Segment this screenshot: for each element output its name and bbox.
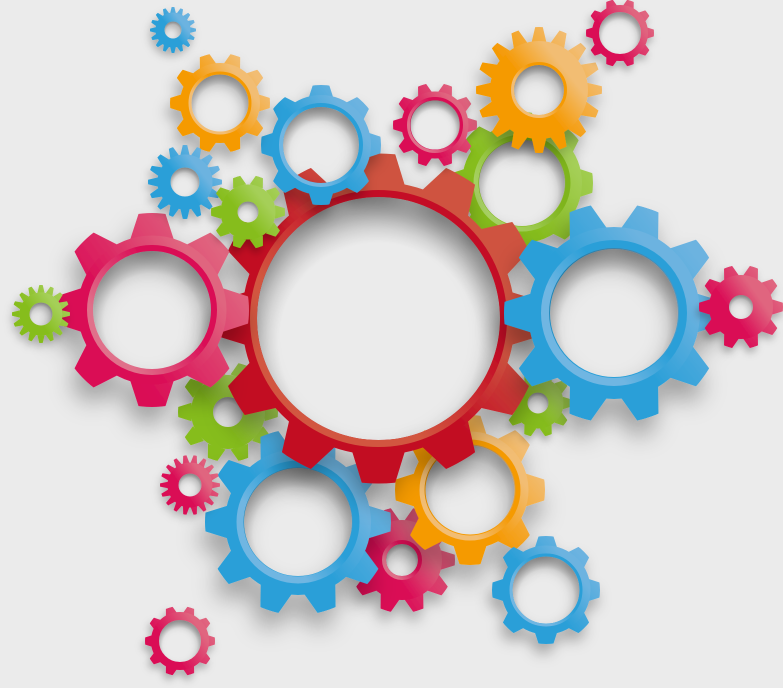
gear: pink top right [586, 0, 654, 67]
gear: pink top centre [393, 83, 477, 167]
gear: large green lower left [178, 362, 278, 462]
gear: blue top centre [261, 85, 381, 205]
gear: small blue left [148, 145, 222, 219]
gear: large blue right [504, 203, 724, 423]
gear: small pink lower left [160, 455, 220, 515]
gear: small green right [504, 369, 572, 437]
gear: large pink left [55, 213, 249, 407]
gear: big central red [214, 154, 544, 484]
gear: small green centre left [211, 175, 285, 249]
gear: large blue lower left [205, 429, 391, 615]
gear: large orange lower right [395, 415, 545, 565]
gear: pink far right [699, 265, 783, 349]
gear: green top right [451, 112, 593, 254]
gear: blue lower right [492, 536, 600, 644]
gear: orange top left [170, 53, 270, 153]
gear: crimson behind blue, lower centre [349, 507, 455, 613]
gear: tiny blue top [150, 7, 196, 53]
gear: pink bottom left [145, 606, 215, 676]
gear: orange top [476, 27, 602, 153]
gear: small green far left [12, 285, 70, 343]
